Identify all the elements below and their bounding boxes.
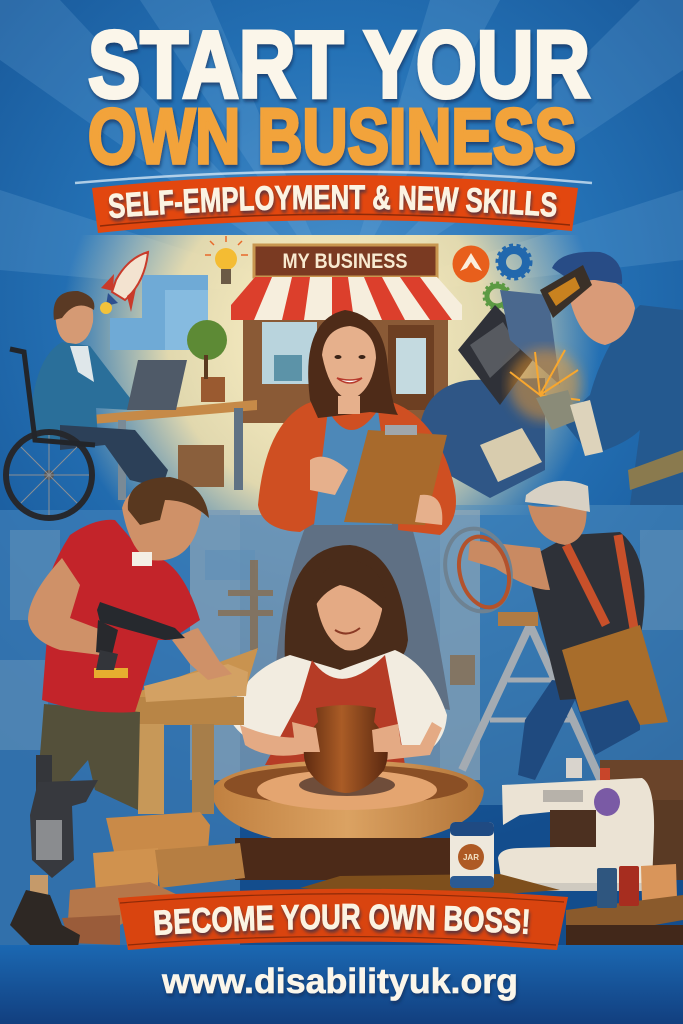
glove: [536, 390, 578, 430]
cap: [552, 252, 622, 284]
title line 1: START YOUR: [88, 12, 590, 118]
icon: rocket: [100, 252, 148, 314]
head: [528, 502, 587, 545]
clipboard: [344, 425, 447, 525]
title: [88, 12, 590, 180]
top: [314, 410, 392, 525]
thread spools: [597, 866, 639, 908]
work piece: [420, 378, 545, 498]
goggles: [540, 265, 592, 318]
skirt: [275, 520, 450, 710]
icon: lightbulb: [205, 236, 248, 284]
hands: [292, 722, 402, 752]
hair: [285, 545, 408, 675]
shirt: [42, 520, 200, 712]
small box and table: [566, 864, 683, 947]
face: [316, 572, 382, 650]
electrician: [436, 481, 668, 790]
head: [55, 292, 93, 344]
torso: [30, 342, 130, 440]
paint tin: [450, 822, 494, 888]
wheel: [211, 760, 484, 880]
harness: [566, 535, 636, 640]
head: [122, 482, 201, 560]
body: [525, 532, 644, 700]
shop: [231, 245, 462, 423]
icon: blue gear: [497, 245, 531, 279]
title line 2: OWN BUSINESS: [88, 92, 576, 180]
drill: [94, 602, 185, 678]
icon: green gear: [484, 283, 510, 309]
tool belt: [562, 625, 668, 725]
legs: [38, 704, 140, 810]
shop sign: MY BUSINESS: [282, 250, 408, 273]
icon: orange badge: [452, 246, 490, 282]
cap: [525, 481, 590, 512]
clay pot: [304, 705, 388, 793]
sewing machine: [498, 758, 654, 891]
wheelchair man: [6, 291, 257, 518]
woman with clipboard: [258, 310, 456, 710]
arms: [28, 558, 112, 656]
subtitle banner: SELF-EMPLOYMENT & NEW SKILLS: [108, 185, 560, 224]
laptop: [127, 360, 187, 410]
bench top: [300, 874, 560, 900]
subtitle banner: [74, 170, 592, 233]
cable coil: [436, 521, 520, 619]
face: [322, 326, 376, 400]
wheelchair: [6, 432, 92, 518]
cardigan: [258, 395, 456, 535]
awning: [231, 277, 462, 320]
arms: [240, 722, 442, 760]
legs: [60, 425, 168, 488]
cardboard boxes: [62, 812, 245, 945]
apron: [265, 655, 405, 765]
bottom banner: [118, 888, 568, 950]
body: [562, 305, 683, 505]
workbench: [114, 648, 258, 814]
desk and plant: [92, 320, 257, 500]
drill man: [28, 477, 258, 814]
bottom band: [0, 945, 683, 1024]
shop sign: [254, 245, 437, 277]
trousers: [518, 680, 640, 780]
hand: [310, 457, 348, 495]
boot: [10, 890, 80, 947]
prosthetic leg: [30, 755, 98, 910]
arm: [468, 540, 550, 590]
crates right: [600, 760, 683, 880]
bottom banner: BECOME YOUR OWN BOSS!: [152, 904, 532, 940]
welder: [420, 252, 683, 505]
hair: [308, 310, 398, 418]
website url: www.disabilityuk.org: [161, 962, 518, 1001]
potter: [211, 545, 484, 880]
torso: [228, 650, 447, 755]
paint tin: JAR: [463, 853, 479, 862]
head: [570, 279, 635, 345]
skyline: [110, 275, 208, 350]
ladder: [462, 612, 605, 790]
sparks: [509, 349, 581, 421]
